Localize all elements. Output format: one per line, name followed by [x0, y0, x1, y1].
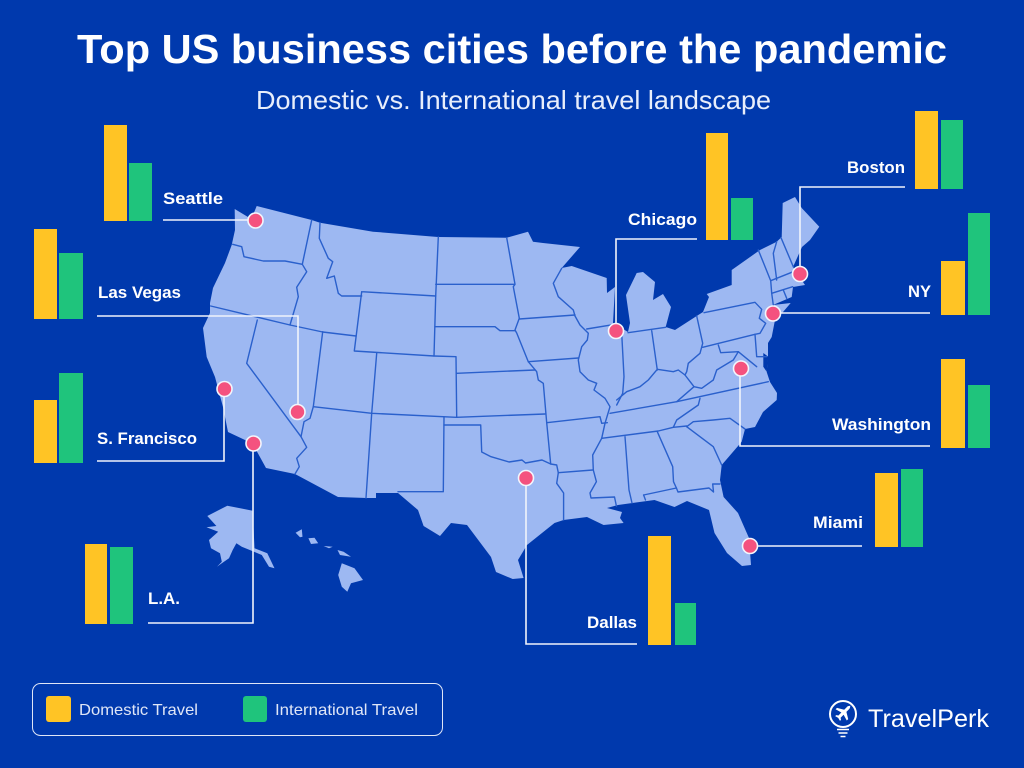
map: state borders	[211, 220, 793, 520]
city label and bars: Dallas: Dallas	[587, 613, 637, 632]
city label and bars: Washington: Washington	[832, 415, 931, 434]
leader line: Las Vegas	[97, 316, 298, 412]
logo: TravelPerk: TravelPerk	[868, 705, 990, 733]
map: contiguous states outline	[203, 197, 819, 579]
city marker: Boston	[792, 266, 808, 282]
map: United States	[203, 197, 819, 592]
city label and bars: Washington	[832, 359, 990, 448]
city label and bars: S. Francisco	[34, 373, 197, 463]
city marker: Dallas	[518, 470, 534, 486]
city label and bars: L.A.: L.A.	[148, 589, 180, 608]
city label and bars: Chicago: Chicago	[628, 210, 697, 229]
leader line: Washington	[740, 368, 930, 446]
title: Top US business cities before the pandemic	[77, 26, 947, 72]
city label and bars: Dallas	[587, 536, 696, 645]
leader line: Dallas	[526, 478, 637, 644]
city marker: Seattle	[248, 213, 263, 228]
logo: TravelPerk	[830, 701, 990, 736]
city label and bars: Las Vegas: Las Vegas	[98, 283, 181, 302]
city marker: Las Vegas	[290, 404, 305, 420]
city marker: S. Francisco	[217, 382, 232, 396]
leader line: Seattle	[163, 219, 255, 221]
map: Alaska	[206, 506, 274, 568]
city label and bars: NY	[908, 213, 990, 315]
city marker: Chicago	[608, 324, 624, 338]
leader line: L.A.	[148, 443, 253, 623]
city label and bars: Chicago	[628, 133, 753, 240]
city label and bars: Boston: Boston	[847, 158, 905, 177]
leader line: S. Francisco	[97, 389, 224, 461]
city marker: Miami	[742, 538, 758, 554]
legend	[32, 684, 442, 736]
city label and bars: Las Vegas	[34, 229, 181, 319]
city label and bars: Boston	[847, 111, 963, 189]
leader line: NY	[772, 312, 930, 314]
city marker: NY	[766, 306, 780, 321]
city label and bars: S. Francisco: S. Francisco	[97, 429, 197, 448]
city label and bars: Seattle	[104, 125, 223, 221]
leader line: Miami	[750, 545, 862, 547]
subtitle: Domestic vs. International travel landscape	[256, 85, 771, 115]
icon: light bulb with plane	[830, 701, 856, 736]
city marker: Washington	[734, 361, 748, 376]
city label and bars: L.A.	[85, 544, 180, 624]
leader line: Boston	[800, 187, 905, 274]
legend: International Travel	[275, 702, 418, 719]
city label and bars: Miami	[813, 469, 923, 547]
map: Chesapeake Bay	[763, 353, 768, 372]
city marker: L.A.	[246, 436, 261, 451]
map: Hawaii	[296, 529, 363, 592]
city label and bars: Seattle: Seattle	[163, 189, 223, 208]
city label and bars: Miami: Miami	[813, 513, 863, 532]
leader line: Chicago	[616, 239, 697, 331]
legend: Domestic Travel	[79, 702, 198, 719]
city label and bars: NY: NY	[908, 282, 932, 301]
